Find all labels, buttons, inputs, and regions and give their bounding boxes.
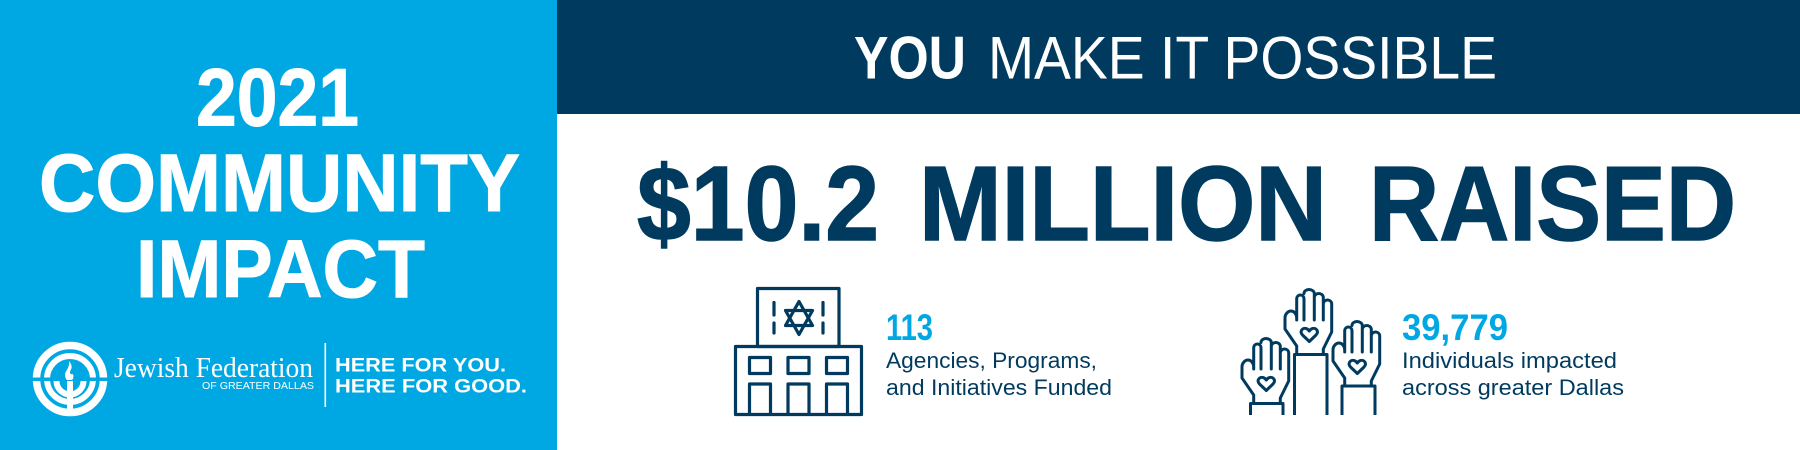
stat: 113 agencies, programs and initiatives funded: 113: [886, 307, 933, 348]
logo wordmark: Jewish Federation of Greater Dallas: Jewish Federation: [114, 353, 313, 384]
panel: left blue title panel: [0, 0, 557, 450]
headline: $10.2 million raised: [637, 145, 1736, 263]
logo wordmark: Jewish Federation of Greater Dallas: OF GREATER DALLAS: [202, 381, 314, 392]
title: 2021 Community Impact: [39, 52, 520, 315]
stat: 39,779 individuals impacted: across greater Dallas: [1402, 375, 1624, 400]
divider line: [324, 343, 326, 407]
logo: Jewish Federation menorah emblem: [30, 346, 110, 412]
icon: raised hands with hearts: [1242, 290, 1380, 415]
stat: 113 agencies, programs and initiatives funded: [886, 307, 1112, 400]
panel: top navy banner: [557, 0, 1800, 114]
tagline: Here for you. Here for good.: HERE FOR YOU.: [335, 356, 506, 376]
headline: $10.2 million raised: RAISED: [1369, 145, 1736, 263]
headline: $10.2 million raised: $10.2: [637, 145, 879, 263]
stat: 113 agencies, programs and initiatives funded: Agencies, Programs,: [886, 348, 1097, 373]
title: 2021 Community Impact: IMPACT: [136, 224, 425, 315]
tagline: Here for you. Here for good.: HERE FOR GOOD.: [335, 376, 527, 398]
tagline: Here for you. Here for good.: [335, 356, 527, 398]
heading: You make it possible: MAKE IT POSSIBLE: [988, 24, 1497, 92]
icon: building with star of David: [736, 288, 862, 414]
stat: 113 agencies, programs and initiatives funded: and Initiatives Funded: [886, 375, 1112, 400]
stat: 39,779 individuals impacted: 39,779: [1402, 307, 1508, 348]
heading: You make it possible: YOU: [854, 24, 966, 92]
headline: $10.2 million raised: MILLION: [919, 145, 1327, 263]
stat: 39,779 individuals impacted: [1402, 307, 1624, 400]
title: 2021 Community Impact: COMMUNITY: [39, 138, 520, 229]
title: 2021 Community Impact: 2021: [196, 52, 359, 144]
stat: 39,779 individuals impacted: Individuals impacted: [1402, 348, 1617, 373]
